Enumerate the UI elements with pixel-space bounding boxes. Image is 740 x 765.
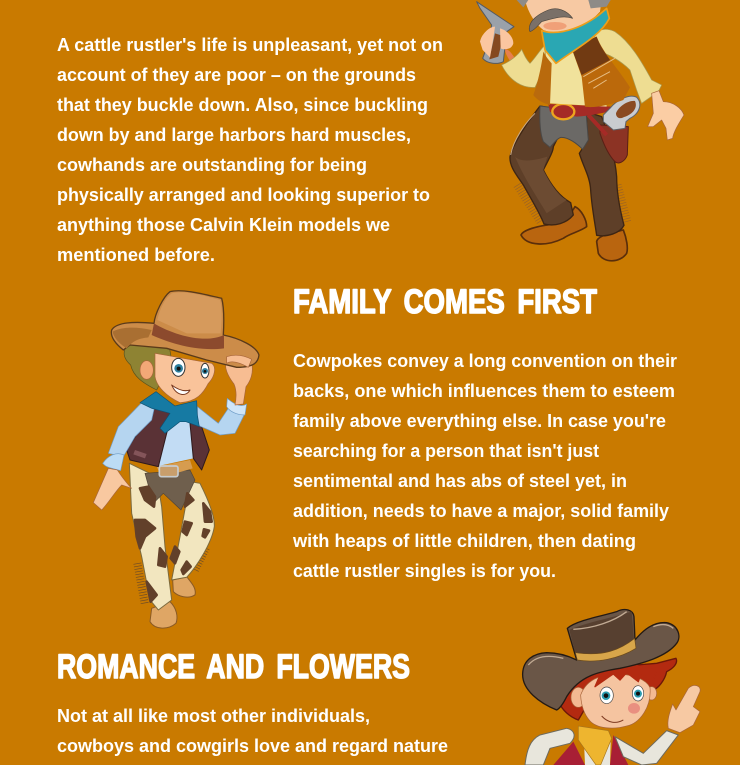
- text block: family comes first: searching for a person that isn't just: [293, 441, 599, 461]
- heading: romance and flowers: ROMANCE AND FLOWERS: [57, 648, 410, 686]
- text block: family comes first: backs, one which influences them to esteem: [293, 381, 675, 401]
- illustration: old cowboy with revolver: [477, 0, 684, 261]
- text block: romance and flowers: Not at all like most other individuals,: [57, 706, 370, 726]
- text block: cattle rustler's life: A cattle rustler's life is unpleasant, yet not on: [57, 35, 443, 55]
- text block: romance and flowers: cowboys and cowgirls love and regard nature: [57, 736, 448, 756]
- text block: cattle rustler's life: down by and large harbors hard muscles,: [57, 125, 411, 145]
- text block: family comes first: [292, 351, 677, 581]
- text block: romance and flowers: [57, 706, 448, 756]
- text block: cattle rustler's life: [57, 35, 443, 265]
- text block: family comes first: cattle rustler singles is for you.: [293, 561, 556, 581]
- text block: cattle rustler's life: mentioned before.: [57, 245, 215, 265]
- text block: family comes first: addition, needs to have a major, solid family: [293, 501, 669, 521]
- text block: family comes first: Cowpokes convey a long convention on their: [293, 351, 677, 371]
- text block: cattle rustler's life: physically arranged and looking superior to: [57, 185, 430, 205]
- illustration: red-haired cowboy pointing: [523, 610, 700, 765]
- text block: family comes first: family above everything else. In case you're: [293, 411, 666, 431]
- text block: cattle rustler's life: that they buckle down. Also, since buckling: [57, 95, 428, 115]
- illustration: young cowboy tipping hat: [93, 291, 259, 628]
- text block: family comes first: sentimental and has abs of steel yet, in: [293, 471, 627, 491]
- text block: cattle rustler's life: anything those Calvin Klein models we: [57, 215, 390, 235]
- text block: family comes first: with heaps of little children, then dating: [292, 531, 636, 551]
- text block: cattle rustler's life: cowhands are outstanding for being: [57, 155, 367, 175]
- text block: cattle rustler's life: account of they are poor – on the grounds: [57, 65, 416, 85]
- heading: family comes first: FAMILY COMES FIRST: [293, 283, 597, 321]
